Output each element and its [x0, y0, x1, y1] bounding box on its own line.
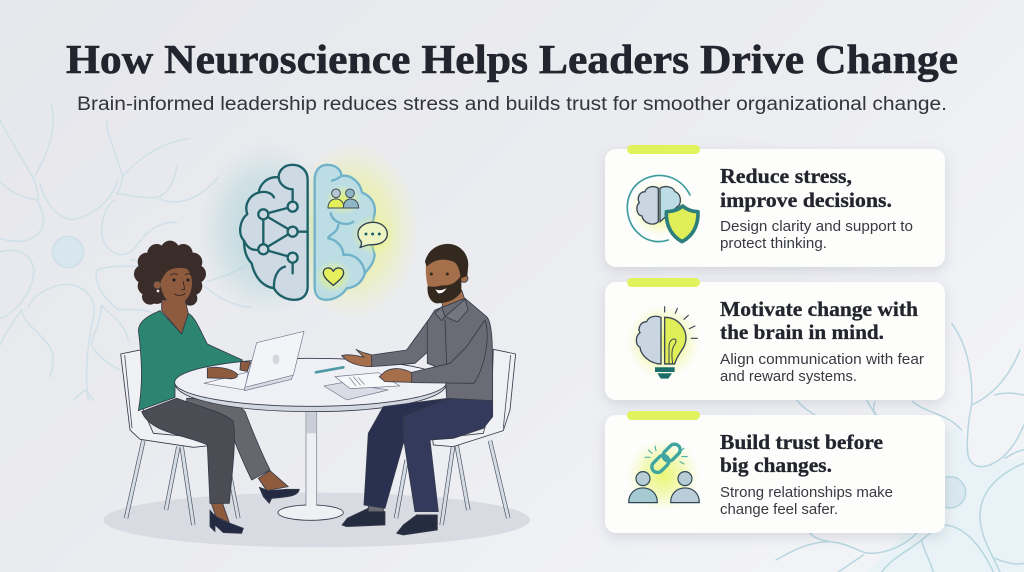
card: reduce stress: [605, 145, 945, 267]
woman: neck and face: [153, 262, 194, 334]
icon: heart: [315, 260, 352, 293]
man: neck and head: [426, 258, 468, 317]
subtitle: Brain-informed leadership reduces stress and builds trust for smoother organizational change.: [77, 94, 947, 115]
woman: hair: [134, 241, 206, 307]
laptop: [204, 331, 304, 391]
accent tab: [627, 411, 700, 420]
floor shadow: [103, 493, 530, 547]
brain glow: [197, 140, 420, 320]
heading: Motivate change with: [720, 297, 918, 321]
documents: [324, 373, 400, 400]
table: [175, 358, 447, 520]
heading: improve decisions.: [720, 188, 892, 212]
card background: [605, 282, 945, 400]
body text: Strong relationships make: [720, 485, 893, 501]
body text: change feel safer.: [720, 502, 838, 518]
man: hair and beard: [425, 244, 468, 303]
card background: [605, 149, 945, 267]
pen: [316, 367, 343, 372]
man: far leg and shoe: [342, 398, 448, 527]
body text: Design clarity and support to: [720, 219, 913, 235]
icon: brain with shield: [627, 175, 698, 242]
body text: Align communication with fear: [720, 352, 924, 368]
woman: near leg and shoe: [142, 398, 243, 533]
woman: green sweater: [138, 311, 242, 411]
chair: right: [396, 349, 516, 525]
card: build trust: [605, 411, 945, 533]
icon: brain lightbulb: [626, 304, 701, 379]
accent tab: [627, 278, 700, 287]
body text: and reward systems.: [720, 369, 857, 385]
accent tab: [627, 145, 700, 154]
woman: hands: [207, 361, 251, 379]
heading: the brain in mind.: [720, 320, 884, 344]
man: grey shirt: [372, 298, 493, 401]
brain: right social hemisphere: [315, 165, 375, 300]
man: near leg and shoe: [397, 398, 493, 535]
heading: Reduce stress,: [720, 164, 852, 188]
background neuron: left: [0, 105, 252, 400]
chair: left: [121, 349, 238, 525]
card: motivate change: [605, 278, 945, 400]
body text: protect thinking.: [720, 236, 827, 252]
woman: far leg and shoe: [187, 398, 299, 503]
icon: people: [325, 185, 362, 215]
heading: big changes.: [720, 453, 832, 477]
card background: [605, 415, 945, 533]
title: How Neuroscience Helps Leaders Drive Change: [66, 36, 958, 82]
icon: linked people: [627, 438, 700, 512]
man: hands: [342, 349, 412, 382]
illustration: meeting scene: [103, 140, 530, 547]
brain: left analytical hemisphere: [240, 165, 308, 300]
heading: Build trust before: [720, 430, 883, 454]
icon: chat bubble: [351, 215, 395, 255]
background neuron: right: [776, 323, 1024, 572]
